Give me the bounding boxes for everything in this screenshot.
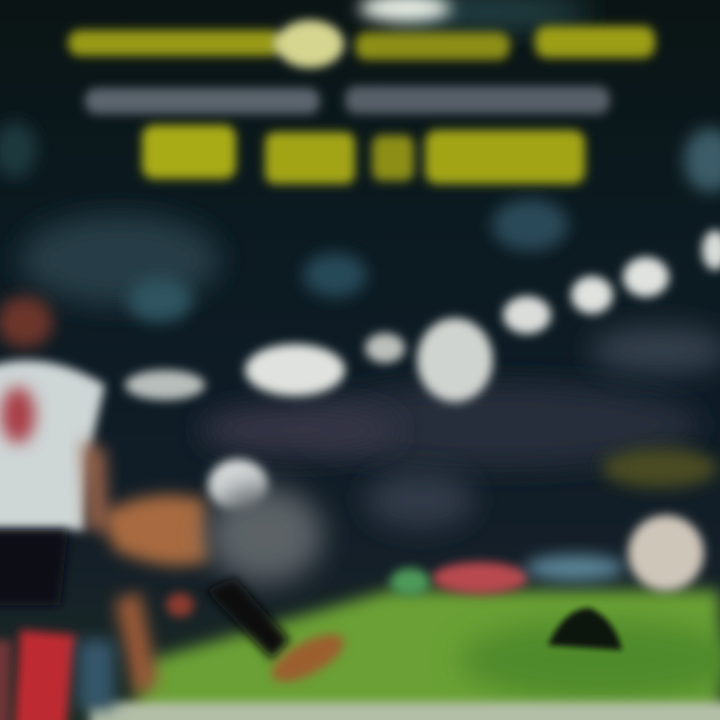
pitch: [90, 555, 720, 720]
heading line 2: [85, 86, 610, 114]
heading line 1: [68, 20, 655, 68]
player: foreground left: [0, 296, 114, 720]
player: kicking, centre: [100, 459, 351, 695]
stadium lights arc: [125, 230, 720, 402]
heading line 3: [142, 125, 585, 184]
football: [628, 515, 704, 591]
top light flare: [359, 0, 451, 22]
heading: illegible blurred headline: [68, 20, 655, 184]
